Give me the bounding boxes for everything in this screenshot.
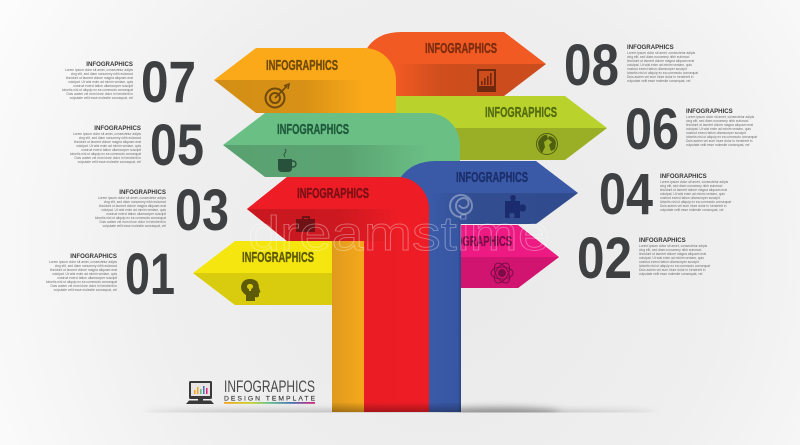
text block 02: volutpat. Ut wisi enim ad minim veniam, quis	[639, 256, 704, 260]
text block 03: Duis autem vel eum iriure dolor in hendrerit in	[99, 220, 166, 224]
text block 06: cing elit, sed diam nonummy nibh euismod	[686, 119, 748, 123]
heading 01: INFOGRAPHICS	[242, 250, 314, 266]
text block 08	[627, 44, 698, 83]
text block 01: Lorem ipsum dolor sit amet, consectetur adipis	[49, 260, 117, 264]
text block 03: nostrud exerci tation ullamcorper suscipit	[106, 212, 166, 216]
text block 07: cing elit, sed diam nonummy nibh euismod	[71, 72, 133, 76]
text block 01: cing elit, sed diam nonummy nibh euismod	[55, 264, 117, 268]
arrow 03: red with column	[247, 177, 429, 412]
text block 06: Lorem ipsum dolor sit amet, consectetur adipis	[686, 115, 755, 119]
text block 02: INFOGRAPHICS	[639, 237, 686, 244]
number 05: 05	[150, 113, 204, 178]
text block 07: INFOGRAPHICS	[86, 61, 133, 68]
heading 07: INFOGRAPHICS	[266, 58, 338, 74]
text block 06	[686, 108, 757, 147]
text block 03: INFOGRAPHICS	[119, 189, 166, 196]
text block 08: Duis autem vel eum iriure dolor in hendrerit in	[627, 75, 694, 79]
text block 06: lobortis nisl ut aliquip ex ea commodo consequat	[686, 135, 757, 139]
text block 02: vulputate velit esse molestie consequat, vel	[639, 272, 703, 276]
footer subtitle: DESIGN TEMPLATE	[224, 396, 315, 402]
icon: globe	[536, 134, 558, 154]
text block 04: INFOGRAPHICS	[660, 173, 707, 180]
icon: bar chart tablet	[477, 69, 496, 92]
text block 02: cing elit, sed diam nonummy nibh euismod	[639, 248, 701, 252]
number 06: 06	[625, 97, 679, 162]
icon: head with bulb	[241, 279, 260, 301]
text block 07: volutpat. Ut wisi enim ad minim veniam, quis	[68, 80, 133, 84]
text block 08: INFOGRAPHICS	[627, 44, 674, 51]
text block 06: Duis autem vel eum iriure dolor in hendrerit in	[686, 139, 753, 143]
text block 01: lobortis nisl ut aliquip ex ea commodo consequat	[46, 280, 117, 284]
heading 05: INFOGRAPHICS	[277, 122, 349, 138]
text block 03: Lorem ipsum dolor sit amet, consectetur adipis	[98, 196, 166, 200]
heading 06: INFOGRAPHICS	[485, 105, 557, 121]
icon: puzzle piece	[505, 195, 526, 218]
text block 05: Duis autem vel eum iriure dolor in hendrerit in	[74, 156, 141, 160]
text block 05	[70, 125, 141, 164]
rainbow line	[224, 402, 315, 404]
watermark: dreamstime	[248, 208, 550, 261]
number 08: 08	[564, 33, 619, 98]
arrow 01: yellow	[193, 241, 332, 305]
text block 07: Duis autem vel eum iriure dolor in hendrerit in	[66, 92, 133, 96]
number 03: 03	[175, 178, 229, 243]
text block 04: volutpat. Ut wisi enim ad minim veniam, quis	[660, 192, 725, 196]
text block 06: volutpat. Ut wisi enim ad minim veniam, quis	[686, 127, 751, 131]
text block 08: lobortis nisl ut aliquip ex ea commodo consequat	[627, 71, 698, 75]
text block 05: vulputate velit esse molestie consequat, vel	[78, 160, 141, 164]
number 07: 07	[141, 50, 196, 115]
text block 01: Duis autem vel eum iriure dolor in hendrerit in	[50, 284, 117, 288]
heading 03: INFOGRAPHICS	[297, 186, 369, 202]
text block 07: lobortis nisl ut aliquip ex ea commodo consequat	[62, 88, 133, 92]
text block 04: Lorem ipsum dolor sit amet, consectetur adipis	[660, 180, 729, 184]
text block 03: cing elit, sed diam nonummy nibh euismod	[104, 200, 166, 204]
text block 06: vulputate velit esse molestie consequat, vel	[686, 143, 750, 147]
text block 02: nostrud exerci tation ullamcorper suscipit	[639, 260, 699, 264]
text block 05: lobortis nisl ut aliquip ex ea commodo consequat	[70, 152, 141, 156]
text block 03: tincidunt ut laoreet dolore magna aliquam erat	[99, 204, 166, 208]
text block 03: lobortis nisl ut aliquip ex ea commodo consequat	[95, 216, 166, 220]
icon: coffee cup	[278, 149, 296, 172]
text block 04: lobortis nisl ut aliquip ex ea commodo consequat	[660, 200, 731, 204]
text block 02	[639, 237, 710, 276]
text block 07: Lorem ipsum dolor sit amet, consectetur adipis	[65, 68, 133, 72]
arrow 05: green	[223, 113, 460, 177]
orange column	[332, 241, 364, 412]
text block 02: lobortis nisl ut aliquip ex ea commodo consequat	[639, 264, 710, 268]
text block 05: nostrud exerci tation ullamcorper suscipit	[81, 148, 141, 152]
text block 08: volutpat. Ut wisi enim ad minim veniam, quis	[627, 63, 692, 67]
arrow 04: blue with column	[400, 161, 578, 412]
text block 06: INFOGRAPHICS	[686, 108, 733, 115]
column base shading	[332, 402, 461, 412]
text block 08: vulputate velit esse molestie consequat, vel	[627, 79, 691, 83]
text block 07: vulputate velit esse molestie consequat, vel	[70, 96, 133, 100]
footer logo	[186, 378, 315, 404]
arrow 02: pink	[440, 225, 559, 288]
text block 04	[660, 173, 731, 212]
heading 02: INFOGRAPHICS	[440, 234, 512, 250]
heading 08: INFOGRAPHICS	[425, 41, 497, 57]
text block 03	[95, 189, 166, 228]
icon: briefcase	[296, 216, 315, 232]
text block 06: nostrud exerci tation ullamcorper suscipit	[686, 131, 746, 135]
text block 02: Lorem ipsum dolor sit amet, consectetur adipis	[639, 244, 708, 248]
text block 05: cing elit, sed diam nonummy nibh euismod	[79, 136, 141, 140]
text block 07: tincidunt ut laoreet dolore magna aliquam erat	[66, 76, 133, 80]
footer title: INFOGRAPHICS	[224, 378, 315, 396]
text block 07	[62, 61, 133, 100]
text block 05: volutpat. Ut wisi enim ad minim veniam, quis	[76, 144, 141, 148]
heading 04: INFOGRAPHICS	[456, 170, 528, 186]
text block 05: Lorem ipsum dolor sit amet, consectetur adipis	[73, 132, 141, 136]
numbers	[125, 33, 679, 307]
text block 03: vulputate velit esse molestie consequat, vel	[103, 224, 166, 228]
text block 03: volutpat. Ut wisi enim ad minim veniam, quis	[101, 208, 166, 212]
icon: computer monitor	[186, 381, 214, 404]
icon: target	[266, 84, 289, 108]
text block 05: tincidunt ut laoreet dolore magna aliquam erat	[74, 140, 141, 144]
text block 08: nostrud exerci tation ullamcorper suscipit	[627, 67, 687, 71]
text block 02: Duis autem vel eum iriure dolor in hendrerit in	[639, 268, 706, 272]
text block 01	[46, 253, 117, 292]
arrow 07: orange	[214, 48, 396, 113]
text block 04: tincidunt ut laoreet dolore magna aliquam erat	[660, 188, 727, 192]
text block 06: tincidunt ut laoreet dolore magna aliquam erat	[686, 123, 753, 127]
text block 08: Lorem ipsum dolor sit amet, consectetur adipis	[627, 51, 696, 55]
text block 05: INFOGRAPHICS	[94, 125, 141, 132]
text block 04: vulputate velit esse molestie consequat, vel	[660, 208, 724, 212]
text block 04: Duis autem vel eum iriure dolor in hendrerit in	[660, 204, 727, 208]
text block 04: nostrud exerci tation ullamcorper suscipit	[660, 196, 720, 200]
arrow 08: red-orange	[366, 32, 546, 96]
text block 04: cing elit, sed diam nonummy nibh euismod	[660, 184, 722, 188]
text block 02: tincidunt ut laoreet dolore magna aliquam erat	[639, 252, 706, 256]
text block 01: nostrud exerci tation ullamcorper suscipit	[57, 276, 117, 280]
floor shadow	[150, 403, 650, 412]
text block 08: tincidunt ut laoreet dolore magna aliquam erat	[627, 59, 694, 63]
arrow 06: lime	[396, 96, 607, 160]
text block 01: volutpat. Ut wisi enim ad minim veniam, quis	[52, 272, 117, 276]
text block 07: nostrud exerci tation ullamcorper suscipit	[73, 84, 133, 88]
icon: atom	[491, 260, 513, 286]
number 02: 02	[577, 226, 632, 291]
text block 01: tincidunt ut laoreet dolore magna aliquam erat	[50, 268, 117, 272]
text block 08: cing elit, sed diam nonummy nibh euismod	[627, 55, 689, 59]
text block 01: INFOGRAPHICS	[70, 253, 117, 260]
number 01: 01	[125, 242, 175, 307]
number 04: 04	[599, 162, 653, 227]
text block 01: vulputate velit esse molestie consequat, vel	[54, 288, 117, 292]
watermark	[248, 195, 550, 261]
